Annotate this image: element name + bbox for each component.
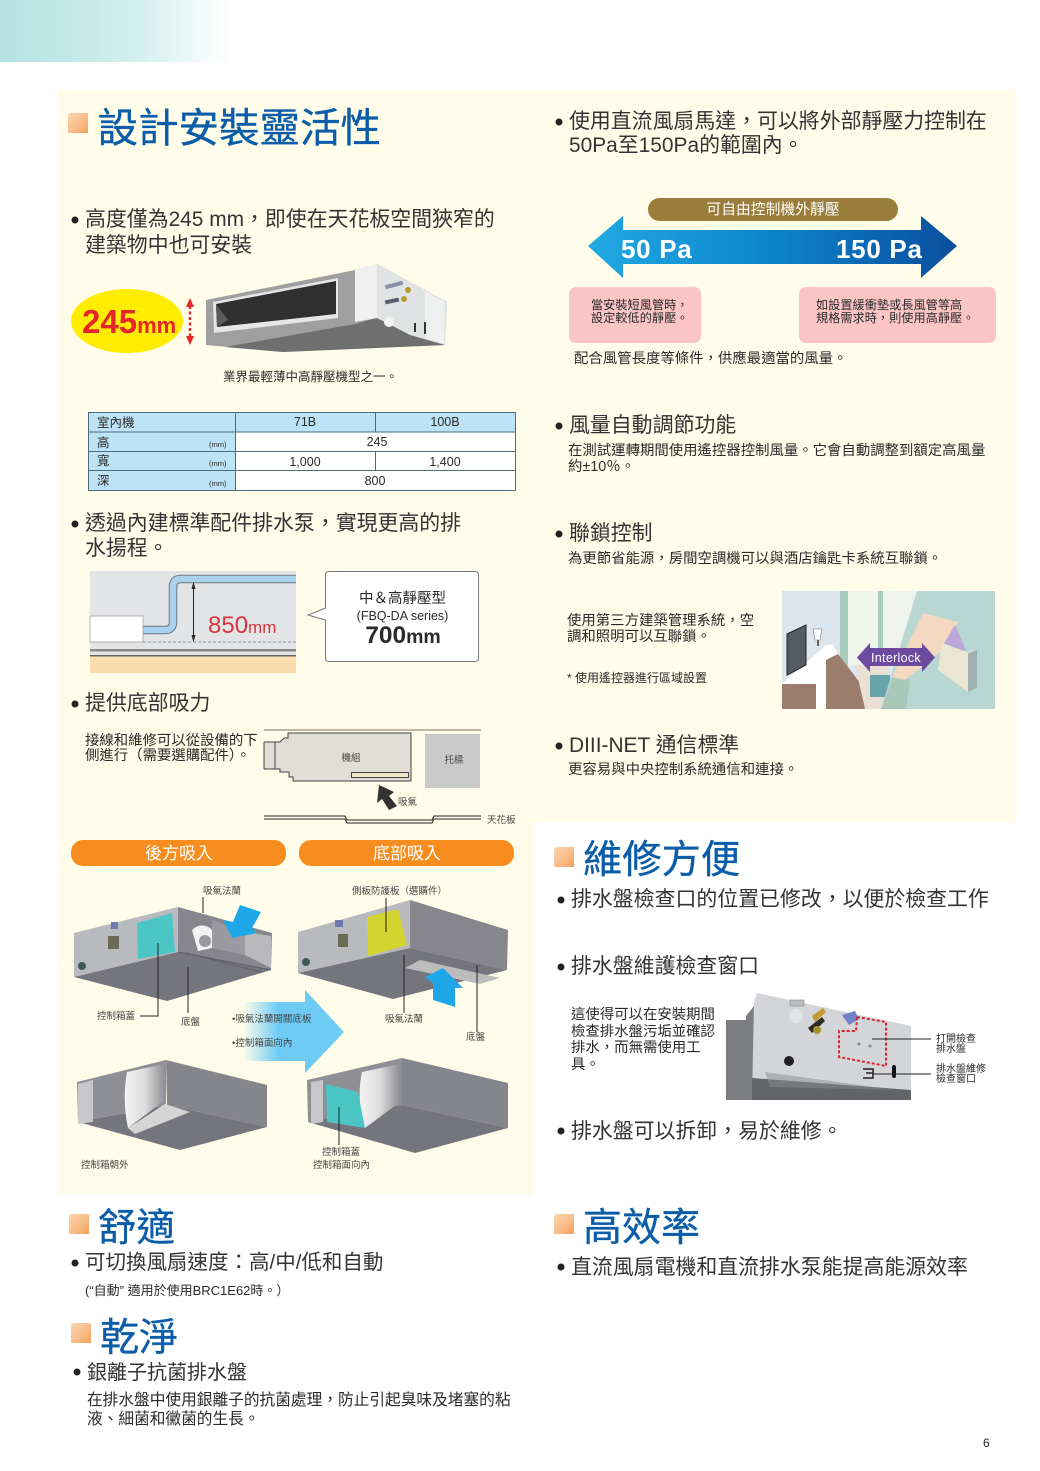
bullet: drain pump: 透過內建標準配件排水泵，實現更高的排 bbox=[85, 512, 461, 535]
bullet: silver ion drain pan: 液、細菌和黴菌的生長。 bbox=[87, 1410, 260, 1428]
table: dimensions: 深 bbox=[97, 474, 110, 488]
cream background panel bbox=[58, 90, 1016, 1195]
tab: rear suction bbox=[71, 840, 286, 866]
bullet: auto airflow: 風量自動調節功能 bbox=[569, 414, 736, 437]
bullet: DC fan motor: 使用直流風扇馬達，可以將外部靜壓力控制在 bbox=[569, 110, 987, 133]
labels: suction diagrams: 控制箱朝外 bbox=[81, 1159, 129, 1171]
bullet: DIII-NET bbox=[556, 734, 798, 778]
diagram: bottom suction section: 托樑 bbox=[444, 754, 464, 766]
bullet: 245 mm height: 建築物中也可安裝 bbox=[85, 234, 252, 257]
text: third party management: 使用第三方建築管理系統，空 bbox=[567, 611, 754, 629]
icon: red height arrow bbox=[186, 298, 194, 345]
diagram: bottom suction section bbox=[264, 730, 516, 826]
arrow: 50 Pa to 150 Pa bbox=[588, 216, 957, 278]
table: dimensions: (mm) bbox=[209, 440, 227, 449]
table: dimensions: (mm) bbox=[209, 479, 227, 488]
bullet: DC fan motor bbox=[556, 110, 987, 157]
top corner colour band bbox=[0, 0, 232, 62]
illustration: control box inward bbox=[307, 1058, 508, 1153]
text: third party management: * 使用遙控器進行區域設置 bbox=[567, 670, 707, 685]
table: dimensions: (mm) bbox=[209, 459, 227, 468]
badge: 245mm: 245mm bbox=[82, 303, 176, 340]
table: dimensions: 1,400 bbox=[429, 455, 461, 469]
section heading: high efficiency: 高效率 bbox=[583, 1207, 700, 1250]
note: low static pressure: 設定較低的靜壓。 bbox=[591, 310, 688, 325]
text: wiring and maintenance: 側進行（需要選購配件）。 bbox=[85, 747, 250, 764]
bullet: silver ion drain pan: 在排水盤中使用銀離子的抗菌處理，防止引起臭味及堵塞的粘 bbox=[87, 1391, 511, 1409]
table: dimensions bbox=[88, 412, 516, 491]
labels: inspection window bbox=[872, 1032, 986, 1085]
bullet: interlock control: 為更節省能源，房間空調機可以與酒店鑰匙卡系統互聯鎖。 bbox=[568, 549, 942, 567]
bullet: DC fan motor: 50Pa至150Pa的範圍內。 bbox=[569, 134, 804, 157]
note: low static pressure bbox=[569, 287, 701, 343]
bullet: inspection window: 排水盤維護檢查窗口 bbox=[571, 955, 759, 978]
table: dimensions: 室內機 bbox=[97, 415, 135, 430]
illustration: interlock room bbox=[782, 591, 995, 709]
table: dimensions: 寬 bbox=[97, 453, 110, 468]
section heading: easy maintenance: 維修方便 bbox=[583, 838, 740, 882]
illustration: rear suction unit bbox=[74, 897, 272, 1016]
arrow: change direction bbox=[243, 990, 344, 1073]
table: dimensions: 高 bbox=[97, 435, 110, 450]
labels: suction diagrams: 控制箱面向內 bbox=[313, 1159, 370, 1171]
diagram: bottom suction section: 機組 bbox=[341, 752, 361, 764]
bullet: silver ion drain pan bbox=[74, 1361, 511, 1428]
bullet: bottom suction: 提供底部吸力 bbox=[85, 692, 210, 715]
bullet: 245 mm height: 高度僅為245 mm，即使在天花板空間狹窄的 bbox=[85, 208, 495, 231]
bullet: interlock control: 聯鎖控制 bbox=[569, 522, 653, 545]
note: high static pressure: 規格需求時，則使用高靜壓。 bbox=[816, 310, 974, 325]
arrow: 50 Pa to 150 Pa: 50 Pa bbox=[621, 234, 692, 264]
labels: suction diagrams: •控制箱面向內 bbox=[232, 1037, 292, 1049]
labels: suction diagrams bbox=[81, 885, 486, 1171]
diagram: 850mm drain lift: 850mm bbox=[208, 612, 276, 639]
text: optimal airflow: 配合風管長度等條件，供應最適當的風量。 bbox=[574, 349, 847, 367]
bullet: interlock control bbox=[556, 522, 942, 567]
pill: static pressure control bbox=[648, 198, 898, 221]
diagram: bottom suction section: 天花板 bbox=[487, 814, 516, 826]
labels: suction diagrams: 側板防護板（選購件） bbox=[352, 885, 447, 897]
labels: inspection window: 打開檢查 bbox=[936, 1032, 976, 1045]
bullet: auto airflow: 在測試運轉期間使用遙控器控制風量。它會自動調整到額定高風量 bbox=[568, 441, 985, 459]
labels: suction diagrams: 控制箱蓋 bbox=[322, 1146, 361, 1158]
labels: suction diagrams: 底盤 bbox=[466, 1031, 486, 1043]
text: third party management: 調和照明可以互聯鎖。 bbox=[567, 628, 711, 645]
bullet: 245 mm height bbox=[72, 208, 495, 257]
text: wiring and maintenance: 接線和維修可以從設備的下 bbox=[85, 732, 258, 749]
labels: inspection window: 檢查窗口 bbox=[936, 1072, 976, 1085]
text: inspection during install: 檢查排水盤污垢並確認 bbox=[571, 1023, 715, 1040]
caption: one of thinnest: 業界最輕薄中高靜壓機型之一。 bbox=[223, 369, 398, 384]
note: low static pressure: 當安裝短風管時， bbox=[591, 297, 688, 312]
bullet: fan speed: (“自動” 適用於使用BRC1E62時。） bbox=[85, 1283, 289, 1298]
text: third party management bbox=[567, 611, 754, 685]
section heading: design flexibility: 設計安裝靈活性 bbox=[98, 105, 381, 151]
table: dimensions: 1,000 bbox=[289, 455, 321, 469]
table: dimensions: 100B bbox=[430, 415, 460, 429]
bullet: auto airflow: 約±10％。 bbox=[568, 458, 635, 475]
bullet: drain pan inspection: 排水盤檢查口的位置已修改，以便於檢查工作 bbox=[571, 888, 989, 911]
illustration: bottom suction unit bbox=[298, 898, 508, 1032]
bullet: fan speed: 可切換風扇速度：高/中/低和自動 bbox=[85, 1251, 383, 1274]
labels: suction diagrams: 底盤 bbox=[181, 1016, 201, 1028]
diagram: bottom suction section: 吸氣 bbox=[398, 796, 418, 808]
labels: inspection window: 排水盤維修 bbox=[936, 1062, 986, 1075]
bullet: DC motor efficiency: 直流風扇電機和直流排水泵能提高能源效率 bbox=[571, 1256, 968, 1279]
callout: 700mm: 700mm bbox=[365, 622, 441, 649]
badge: 245mm bbox=[71, 289, 183, 353]
tab: rear suction: 後方吸入 bbox=[145, 844, 213, 863]
bullet: DIII-NET: DIII-NET 通信標準 bbox=[569, 734, 739, 757]
bullet: auto airflow bbox=[556, 414, 985, 475]
labels: suction diagrams: 吸氣法蘭 bbox=[385, 1013, 423, 1025]
tab: bottom suction bbox=[299, 840, 514, 866]
note: high static pressure: 如設置緩衝墊或長風管等高 bbox=[816, 297, 962, 312]
labels: suction diagrams: 控制箱蓋 bbox=[97, 1010, 136, 1022]
callout: 700mm: 中＆高靜壓型 bbox=[359, 590, 446, 607]
text: inspection during install: 這使得可以在安裝期間 bbox=[571, 1005, 715, 1023]
labels: inspection window: 排水盤 bbox=[936, 1042, 966, 1055]
labels: suction diagrams: 吸氣法蘭 bbox=[203, 885, 241, 897]
diagram: 850mm drain lift bbox=[90, 571, 296, 673]
tab: bottom suction: 底部吸入 bbox=[373, 844, 441, 863]
bullet: fan speed bbox=[72, 1251, 383, 1298]
bullet: drain pump: 水揚程。 bbox=[85, 537, 169, 560]
table: dimensions: 800 bbox=[365, 474, 385, 488]
callout: 700mm bbox=[308, 572, 478, 662]
illustration: control box outward bbox=[77, 1060, 267, 1150]
section heading: clean: 乾淨 bbox=[100, 1317, 178, 1360]
callout: 700mm: (FBQ-DA series) bbox=[357, 609, 448, 623]
section heading: comfort: 舒適 bbox=[98, 1207, 175, 1250]
text: inspection during install: 排水，而無需使用工 bbox=[571, 1039, 701, 1056]
note: high static pressure bbox=[799, 287, 996, 343]
page number: 6 bbox=[983, 1436, 990, 1450]
illustration: slim duct unit bbox=[206, 264, 447, 352]
table: dimensions: 245 bbox=[367, 435, 387, 449]
bullet: silver ion drain pan: 銀離子抗菌排水盤 bbox=[87, 1361, 247, 1384]
table: dimensions: 71B bbox=[294, 415, 316, 429]
text: inspection during install bbox=[571, 1005, 715, 1073]
arrow: 50 Pa to 150 Pa: 150 Pa bbox=[836, 234, 923, 264]
illustration: inspection window photo bbox=[726, 993, 911, 1100]
illustration: interlock room: Interlock bbox=[871, 651, 921, 665]
bullet: drain pump bbox=[72, 512, 461, 560]
text: inspection during install: 具。 bbox=[571, 1057, 600, 1073]
text: wiring and maintenance bbox=[85, 732, 258, 764]
pill: static pressure control: 可自由控制機外靜壓 bbox=[706, 201, 840, 218]
bullet: DIII-NET: 更容易與中央控制系統通信和連接。 bbox=[568, 761, 798, 778]
labels: suction diagrams: •吸氣法蘭開關底板 bbox=[232, 1013, 312, 1025]
bullet: removable drain pan: 排水盤可以拆卸，易於維修。 bbox=[571, 1120, 843, 1143]
